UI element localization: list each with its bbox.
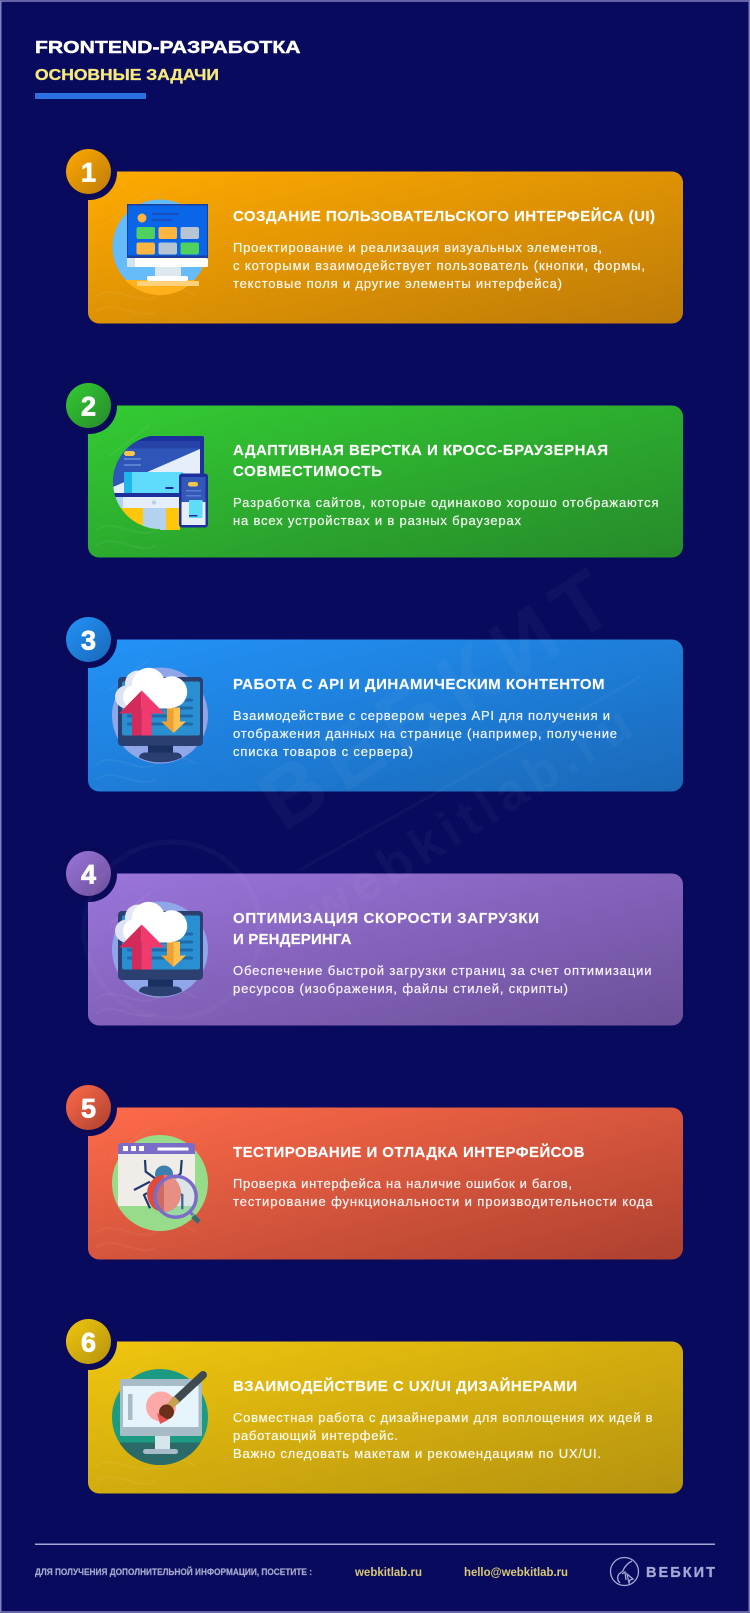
card body text	[233, 495, 658, 528]
footer note: ДЛЯ ПОЛУЧЕНИЯ ДОПОЛНИТЕЛЬНОЙ ИНФОРМАЦИИ, ПОСЕТИТЕ :	[35, 1566, 312, 1577]
title accent bar	[35, 93, 146, 99]
card body text: Проектирование и реализация визуальных элементов,	[233, 240, 602, 255]
icon: desktop and phone	[112, 436, 208, 530]
badge ring	[62, 847, 117, 902]
card body text: Разработка сайтов, которые одинаково хорошо отображаются	[233, 495, 658, 510]
card heading: СОЗДАНИЕ ПОЛЬЗОВАТЕЛЬСКОГО ИНТЕРФЕЙСА (UI)	[233, 207, 655, 225]
badge number 4	[66, 851, 111, 896]
badge number 1	[66, 149, 111, 194]
card body text: работающий интерфейс.	[233, 1428, 398, 1443]
card wave decoration	[96, 894, 196, 1016]
icon: monitor with UI tiles	[110, 200, 210, 300]
card body text: Проверка интерфейса на наличие ошибок и багов,	[233, 1176, 572, 1191]
card body text: ресурсов (изображения, файлы стилей, скрипты)	[233, 981, 568, 996]
panel: card 6 designers	[62, 1315, 683, 1494]
badge number 6: 6	[81, 1328, 96, 1358]
footer divider	[35, 1544, 715, 1545]
badge number 3: 3	[81, 626, 96, 656]
badge ring	[62, 1081, 117, 1136]
panel: card 4 performance	[62, 847, 683, 1026]
card background	[88, 1342, 683, 1494]
card heading: АДАПТИВНАЯ ВЕРСТКА И КРОСС-БРАУЗЕРНАЯ	[233, 442, 608, 459]
subtitle: ОСНОВНЫЕ ЗАДАЧИ	[35, 67, 219, 84]
card body text	[233, 1410, 653, 1461]
card heading: ТЕСТИРОВАНИЕ И ОТЛАДКА ИНТЕРФЕЙСОВ	[233, 1143, 585, 1161]
card wave decoration	[96, 426, 196, 548]
card wave decoration	[96, 1128, 196, 1250]
card body text: Важно следовать макетам и рекомендациям по UX/UI.	[233, 1446, 601, 1461]
badge number 3	[66, 617, 111, 662]
card heading	[233, 442, 608, 480]
panel: card 2 responsive	[62, 379, 683, 558]
icon: monitor with paintbrush	[110, 1369, 210, 1468]
card body text	[233, 1176, 653, 1209]
card heading: И РЕНДЕРИНГА	[233, 931, 352, 948]
badge number 2: 2	[81, 392, 96, 422]
logo	[610, 1558, 715, 1586]
card heading: ВЗАИМОДЕЙСТВИЕ С UX/UI ДИЗАЙНЕРАМИ	[233, 1377, 577, 1395]
card wave decoration	[96, 660, 196, 782]
card background	[88, 172, 683, 324]
card body text	[233, 963, 652, 996]
badge ring	[62, 1315, 117, 1370]
badge ring	[62, 145, 117, 200]
watermark: webkitlab.ru	[297, 695, 642, 941]
watermark: ВЕБКИТ	[242, 551, 628, 848]
card heading: РАБОТА С API И ДИНАМИЧЕСКИМ КОНТЕНТОМ	[233, 676, 604, 693]
logo wordmark: ВЕБКИТ	[646, 1565, 715, 1581]
badge number 6	[66, 1319, 111, 1364]
card body text: отображения данных на странице (например, получение	[233, 726, 617, 741]
card background	[88, 406, 683, 558]
card body text: на всех устройствах и в разных браузерах	[233, 513, 522, 528]
card body text	[233, 708, 617, 759]
title: FRONTEND-РАЗРАБОТКА	[35, 37, 301, 57]
card heading	[233, 910, 539, 948]
badge number 4: 4	[81, 860, 96, 890]
card background	[88, 874, 683, 1026]
panel: card 3 API	[62, 613, 683, 792]
card background	[88, 640, 683, 792]
badge number 1: 1	[81, 158, 96, 188]
card body text: списка товаров с сервера)	[233, 744, 413, 759]
card wave decoration	[96, 1362, 196, 1484]
card body text: Обеспечение быстрой загрузки страниц за счет оптимизации	[233, 963, 652, 978]
card body text: тестирование функциональности и производительности кода	[233, 1194, 653, 1209]
badge ring	[62, 613, 117, 668]
card body text: текстовые поля и другие элементы интерфейса)	[233, 276, 562, 291]
card heading: СОВМЕСТИМОСТЬ	[233, 463, 382, 480]
card wave decoration	[96, 192, 196, 314]
logo mark	[610, 1558, 638, 1586]
card body text: Взаимодействие с сервером через API для получения и	[233, 708, 610, 723]
badge number 2	[66, 383, 111, 428]
panel: card 1 UI	[62, 145, 683, 324]
watermark	[84, 551, 642, 1018]
card body text	[233, 240, 645, 291]
badge number 5: 5	[81, 1094, 96, 1124]
panel: card 5 testing	[62, 1081, 683, 1260]
footer email: hello@webkitlab.ru	[464, 1567, 568, 1579]
card body text: Совместная работа с дизайнерами для воплощения их идей в	[233, 1410, 653, 1425]
badge ring	[62, 379, 117, 434]
icon: cloud data exchange	[112, 902, 208, 998]
badge number 5	[66, 1085, 111, 1130]
footer website: webkitlab.ru	[354, 1567, 422, 1579]
card background	[88, 1108, 683, 1260]
card body text: с которыми взаимодействует пользователь (кнопки, формы,	[233, 258, 645, 273]
icon: cloud data exchange	[112, 668, 208, 764]
card heading: ОПТИМИЗАЦИЯ СКОРОСТИ ЗАГРУЗКИ	[233, 910, 539, 927]
icon: bug under magnifier	[112, 1135, 208, 1231]
